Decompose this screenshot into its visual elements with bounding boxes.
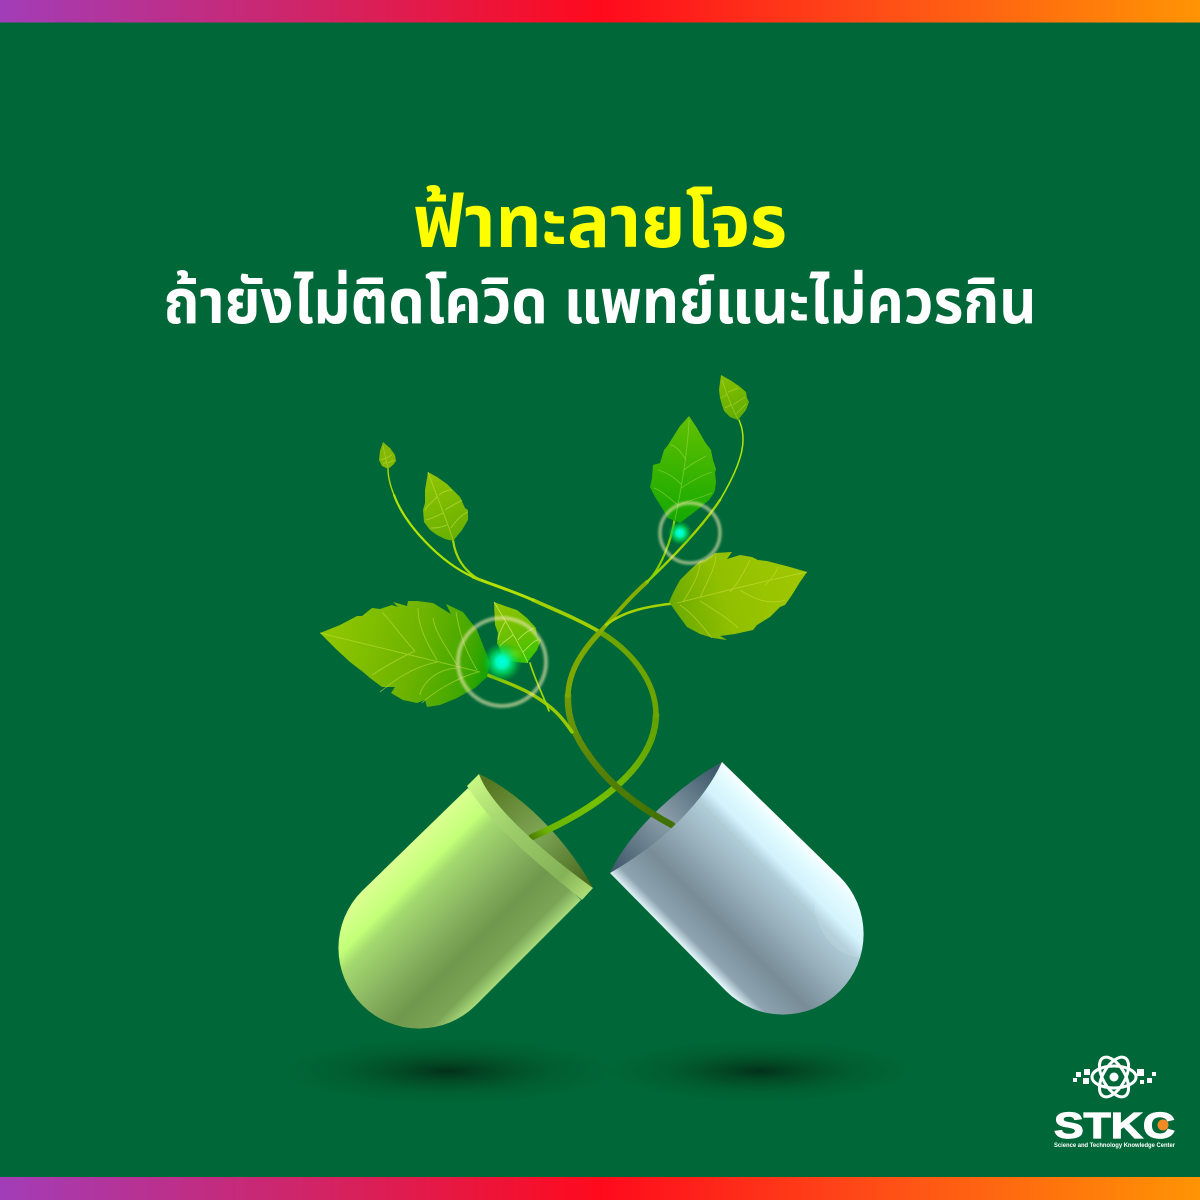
green capsule bbox=[338, 774, 593, 1029]
leaf: upper left bbox=[423, 472, 468, 541]
veins bbox=[654, 420, 712, 520]
glow dot bbox=[668, 521, 692, 545]
plant stems bbox=[388, 420, 743, 837]
leaf: large left bbox=[320, 601, 490, 707]
capsule body bbox=[338, 788, 581, 1029]
logo: atom icon bbox=[1092, 1052, 1136, 1102]
dome highlight bbox=[815, 855, 861, 957]
bottom gradient bar bbox=[0, 1177, 1200, 1200]
veins bbox=[381, 446, 394, 468]
leaf highlight bbox=[498, 647, 522, 663]
rim band bbox=[467, 774, 593, 900]
capsule body bbox=[610, 762, 864, 1015]
white capsule bbox=[610, 762, 864, 1015]
stem from green capsule bbox=[388, 469, 656, 837]
stem from white capsule bbox=[480, 420, 743, 825]
subheading: ถ้ายังไม่ติดโควิด แพทย์แนะไม่ควรกิน bbox=[164, 268, 1036, 337]
leaf: right bbox=[669, 552, 807, 640]
capsule interiors bbox=[479, 762, 722, 888]
leaf: small centre bbox=[494, 602, 541, 663]
glow dot bbox=[482, 642, 522, 682]
leaf: upper right large bbox=[650, 416, 716, 523]
logo: tagline: Science and Technology Knowledge Center bbox=[1054, 1143, 1176, 1149]
glow ring: left bbox=[458, 618, 546, 706]
logo: wordmark: STKC bbox=[1054, 1105, 1175, 1146]
heading: herb name: ฟ้าทะลายโจร bbox=[413, 182, 787, 263]
glow ring: right bbox=[660, 503, 720, 563]
STKC logo bbox=[1054, 1052, 1176, 1149]
veins bbox=[677, 556, 807, 638]
veins bbox=[722, 380, 746, 419]
veins bbox=[494, 602, 538, 663]
leaf: tiny far left bbox=[379, 442, 396, 469]
leaf: top right bbox=[719, 375, 749, 420]
veins bbox=[425, 472, 467, 540]
veins bbox=[320, 608, 480, 703]
logo: orange dot bbox=[1158, 1120, 1168, 1130]
title bbox=[164, 182, 1036, 337]
capsule shadows bbox=[278, 1037, 915, 1105]
top gradient bar bbox=[0, 0, 1200, 22]
logo: pixel squares bbox=[1073, 1069, 1156, 1084]
